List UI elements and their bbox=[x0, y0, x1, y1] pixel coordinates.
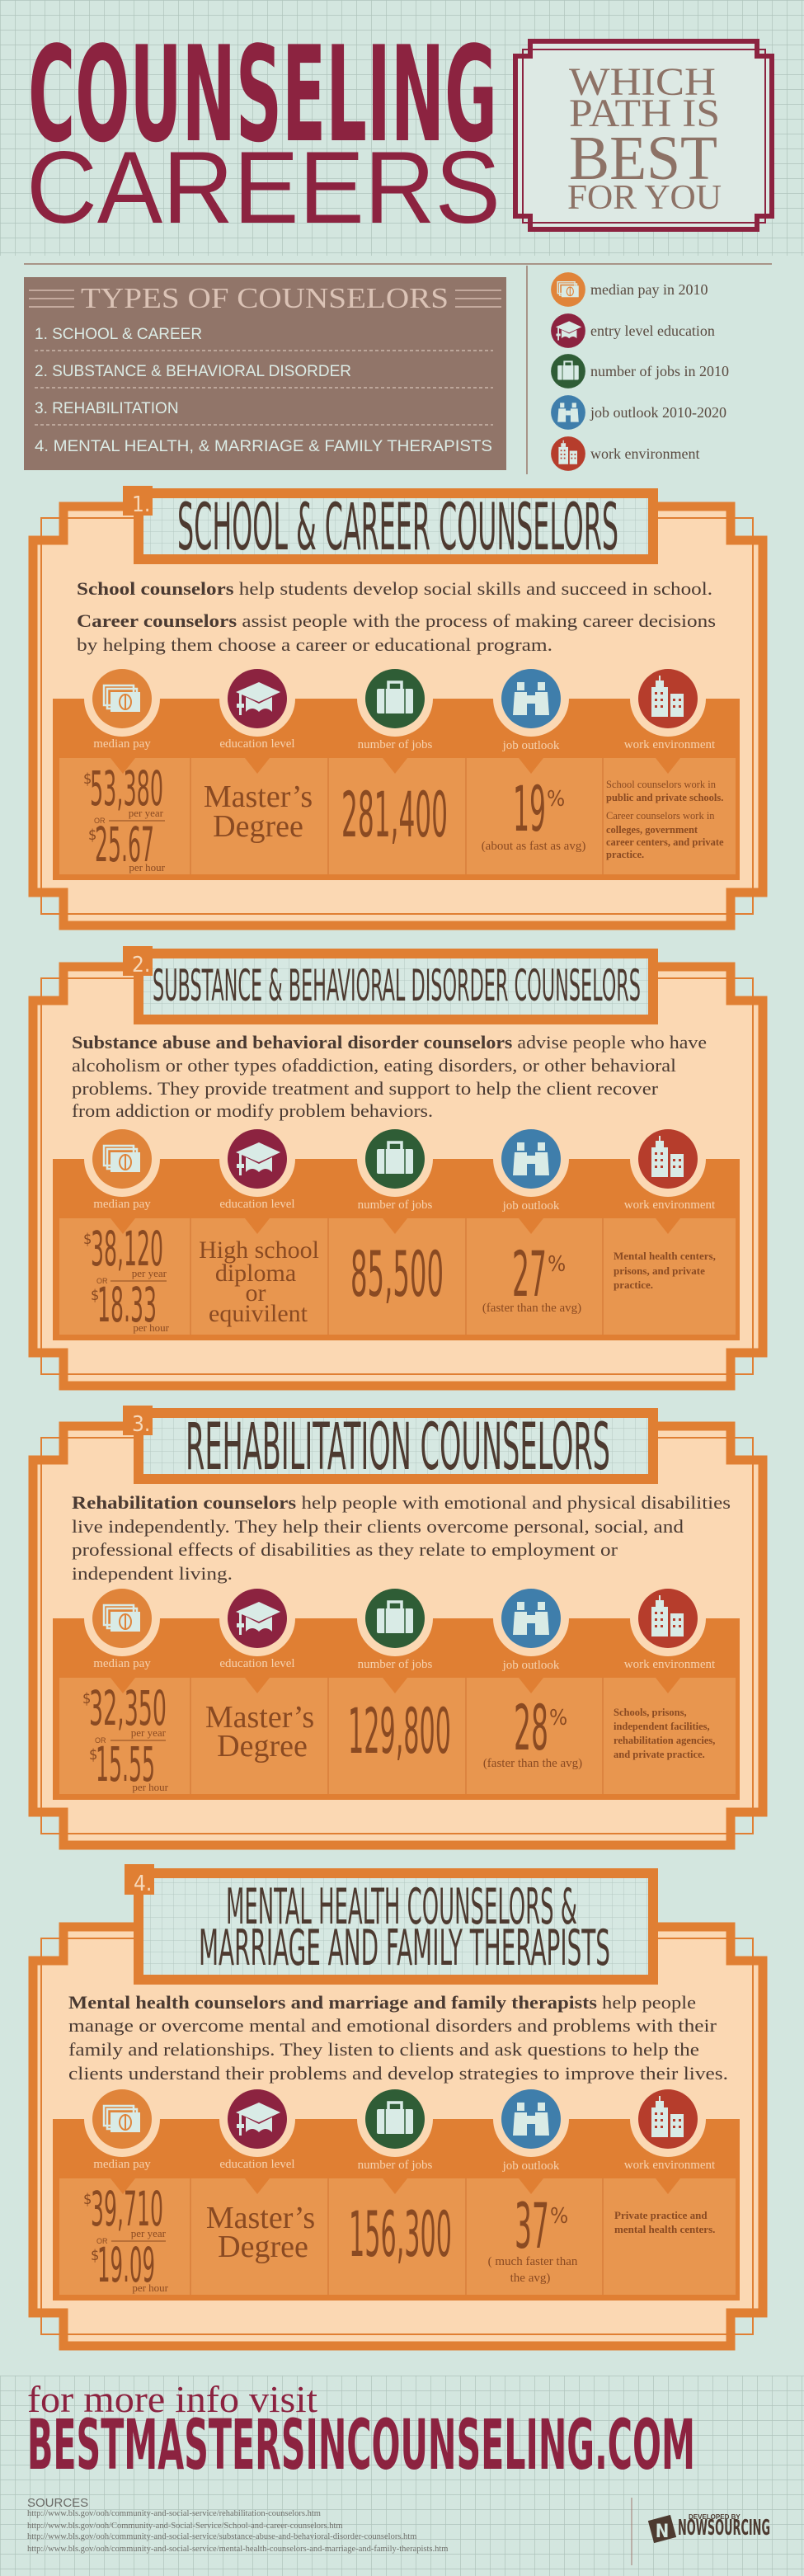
panel: section 1 school & career: job outlook bbox=[502, 739, 560, 752]
panel: section 2 substance & behavioral disorder: alcoholism or other types ofaddiction, eating disorders, or other behavioral bbox=[72, 1055, 676, 1076]
panel: section 2 substance & behavioral disorder: 85,500 bbox=[350, 1237, 444, 1311]
panel: section 2 substance & behavioral disorder: (faster than the avg) bbox=[482, 1302, 581, 1315]
panel: section 4 mental health & marriage and family therapists: job outlook bbox=[502, 2159, 560, 2173]
panel: section 1 school & career: public and private schools. bbox=[606, 792, 723, 803]
panel: section 2 substance & behavioral disorder: 27 bbox=[512, 1237, 547, 1311]
panel: section 1 school & career: colleges, government bbox=[606, 824, 698, 836]
panel: section 1 school & career: Career counselors work in bbox=[606, 810, 715, 822]
panel: section 3 rehabilitation: Schools, prisons, bbox=[614, 1707, 687, 1718]
panel: section 4 mental health & marriage and family therapists: number of jobs bbox=[358, 2159, 433, 2172]
panel: section 3 rehabilitation: 3. bbox=[132, 1412, 150, 1437]
panel: section 2 substance & behavioral disorder: Substance abuse and behavioral disorder counselors advise people who have bbox=[72, 1032, 707, 1053]
panel: section 4 mental health & marriage and family therapists: $ bbox=[91, 2247, 99, 2264]
panel: section 4 mental health & marriage and family therapists: education level bbox=[219, 2158, 295, 2171]
panel: section 3 rehabilitation: independent living. bbox=[72, 1563, 233, 1584]
panel: section 3 rehabilitation: $ bbox=[82, 1690, 91, 1707]
panel: section 1 school & career: 53,380 bbox=[90, 761, 163, 817]
panel: section 2 substance & behavioral disorder: 2. bbox=[132, 953, 150, 977]
legend: entry level education bbox=[590, 323, 715, 339]
panel: section 2 substance & behavioral disorder: education level bbox=[219, 1198, 295, 1211]
panel: section 1 school & career: Career counselors assist people with the process of making career decisions bbox=[77, 610, 716, 631]
panel: section 3 rehabilitation: (faster than the avg) bbox=[483, 1757, 582, 1770]
sources: http://www.bls.gov/ooh/community-and-social-service/mental-health-counselors-and-marriage-and-family-therapists.htm bbox=[27, 2545, 448, 2554]
panel: section 3 rehabilitation: and private practice. bbox=[614, 1749, 705, 1760]
panel: section 4 mental health & marriage and family therapists: % bbox=[550, 2204, 568, 2229]
panel: section 4 mental health & marriage and family therapists: family and relationships. They listen to clients and ask questions to help the bbox=[68, 2039, 699, 2060]
panel: section 4 mental health & marriage and family therapists: $ bbox=[83, 2191, 92, 2208]
panel: section 2 substance & behavioral disorder: number of jobs bbox=[358, 1199, 433, 1212]
panel: section 1 school & career: 25.67 bbox=[95, 817, 154, 873]
panel: types of counselors: TYPES OF COUNSELORS bbox=[81, 282, 449, 314]
panel: section 4 mental health & marriage and family therapists: per hour bbox=[132, 2282, 169, 2294]
panel: section 1 school & career: School counselors work in bbox=[606, 779, 717, 790]
panel: section 3 rehabilitation: % bbox=[549, 1706, 567, 1731]
panel: section 1 school & career: work environment bbox=[624, 738, 716, 751]
panel: section 2 substance & behavioral disorder: Mental health centers, bbox=[614, 1250, 716, 1262]
subtitle box: which path is best for you bbox=[515, 41, 772, 229]
legend: number of jobs in 2010 bbox=[590, 363, 729, 379]
panel: section 2 substance & behavioral disorder: equivilent bbox=[209, 1300, 308, 1327]
panel: section 2 substance & behavioral disorder: 38,120 bbox=[91, 1221, 163, 1277]
panel: section 3 rehabilitation: job outlook bbox=[502, 1659, 560, 1672]
panel: section 4 mental health & marriage and family therapists: mental health centers. bbox=[614, 2223, 715, 2235]
footer: call to action: for more info visit bbox=[27, 2378, 317, 2420]
panel: section 3 rehabilitation: 32,350 bbox=[89, 1680, 167, 1736]
panel: section 2 substance & behavioral disorder: High school bbox=[199, 1236, 319, 1264]
panel: section 3 rehabilitation: 15.55 bbox=[96, 1736, 155, 1792]
panel: section 2 substance & behavioral disorder: 18.33 bbox=[97, 1277, 157, 1333]
panel: types of counselors bbox=[24, 277, 506, 470]
panel: section 1 school & career: per hour bbox=[129, 861, 166, 874]
panel: section 3 rehabilitation: work environment bbox=[624, 1658, 716, 1671]
panel: section 3 rehabilitation: per hour bbox=[132, 1781, 169, 1793]
panel: section 1 school & career: by helping them choose a career or educational program. bbox=[77, 634, 552, 655]
panel: section 1 school & career bbox=[33, 486, 763, 925]
panel: section 3 rehabilitation: per year bbox=[131, 1726, 167, 1739]
panel: section 1 school & career: 1. bbox=[132, 492, 150, 517]
title: CAREERS: CAREERS bbox=[26, 131, 501, 245]
panel: section 3 rehabilitation: Degree bbox=[217, 1729, 308, 1764]
panel: section 1 school & career: Degree bbox=[213, 809, 303, 844]
panel: section 1 school & career: median pay bbox=[93, 737, 151, 751]
panel: section 3 rehabilitation: OR bbox=[95, 1736, 106, 1745]
panel: section 2 substance & behavioral disorder: prisons, and private bbox=[614, 1264, 705, 1277]
panel: section 4 mental health & marriage and family therapists: 19.09 bbox=[97, 2237, 155, 2293]
panel: section 2 substance & behavioral disorder: work environment bbox=[624, 1199, 716, 1212]
panel: section 1 school & career: 281,400 bbox=[341, 778, 448, 851]
panel: section 3 rehabilitation: education level bbox=[219, 1657, 295, 1670]
panel: section 3 rehabilitation: median pay bbox=[93, 1657, 151, 1670]
panel: section 4 mental health & marriage and family therapists: ( much faster than bbox=[488, 2255, 578, 2268]
logo: nowsourcing bbox=[648, 2513, 770, 2543]
panel: section 1 school & career: per year bbox=[129, 807, 164, 819]
legend: work environment bbox=[590, 445, 699, 462]
panel: types of counselors: 2. SUBSTANCE & BEHAVIORAL DISORDER bbox=[35, 363, 351, 380]
panel: section 4 mental health & marriage and family therapists: 4. bbox=[134, 1872, 152, 1896]
panel: section 2 substance & behavioral disorder: problems. They provide treatment and support to help the client recover bbox=[72, 1078, 659, 1099]
panel: section 1 school & career: (about as fast as avg) bbox=[482, 840, 585, 853]
panel: section 4 mental health & marriage and family therapists: 156,300 bbox=[349, 2197, 452, 2271]
footer: call to action bbox=[27, 2378, 695, 2485]
panel: types of counselors: 1. SCHOOL & CAREER bbox=[35, 326, 202, 343]
subtitle box: which path is best for you: BEST bbox=[569, 124, 717, 193]
panel: section 3 rehabilitation: Master’s bbox=[205, 1700, 314, 1735]
panel: section 1 school & career: career centers, and private bbox=[606, 836, 724, 848]
panel: section 3 rehabilitation: rehabilitation agencies, bbox=[614, 1735, 715, 1746]
panel: section 3 rehabilitation: number of jobs bbox=[358, 1658, 433, 1671]
panel: section 3 rehabilitation: live independently. They help their clients overcome personal, social, and bbox=[72, 1516, 684, 1537]
logo: nowsourcing: N bbox=[656, 2522, 669, 2542]
panel: section 4 mental health & marriage and family therapists: clients understand their problems and develop strategies to improve their lives. bbox=[68, 2063, 728, 2084]
panel: section 3 rehabilitation: $ bbox=[89, 1746, 97, 1764]
panel: section 3 rehabilitation: Rehabilitation counselors help people with emotional and physical disabilities bbox=[72, 1492, 731, 1513]
panel: section 1 school & career: % bbox=[547, 787, 565, 812]
panel: section 4 mental health & marriage and family therapists: per year bbox=[131, 2227, 167, 2239]
subtitle box: which path is best for you: PATH IS bbox=[569, 92, 720, 135]
panel: section 4 mental health & marriage and family therapists: median pay bbox=[93, 2158, 151, 2171]
panel: section 2 substance & behavioral disorder: per year bbox=[132, 1267, 167, 1279]
panel: section 4 mental health & marriage and family therapists: Degree bbox=[218, 2230, 308, 2264]
panel: section 1 school & career: $ bbox=[83, 770, 92, 788]
panel: section 1 school & career: practice. bbox=[606, 849, 644, 860]
sources bbox=[27, 2496, 632, 2565]
panel: section 2 substance & behavioral disorder bbox=[33, 946, 763, 1386]
panel: section 2 substance & behavioral disorder: per hour bbox=[133, 1321, 170, 1334]
panel: section 2 substance & behavioral disorder: diploma bbox=[215, 1260, 296, 1287]
panel: section 4 mental health & marriage and family therapists: OR bbox=[96, 2237, 108, 2245]
logo: nowsourcing: DEVELOPED BY bbox=[689, 2513, 741, 2521]
panel: section 4 mental health & marriage and family therapists: work environment bbox=[624, 2159, 716, 2172]
panel: section 4 mental health & marriage and family therapists: Master’s bbox=[206, 2201, 315, 2235]
panel: section 3 rehabilitation: professional effects of disabilities as they relate to employment or bbox=[72, 1539, 618, 1560]
panel: section 1 school & career: Master’s bbox=[204, 779, 313, 814]
panel: section 2 substance & behavioral disorder: or bbox=[246, 1279, 266, 1307]
panel: section 2 substance & behavioral disorder: $ bbox=[91, 1287, 99, 1304]
sources: http://www.bls.gov/ooh/Community-and-Social-Service/School-and-career-counselors.htm bbox=[27, 2522, 343, 2531]
panel: section 2 substance & behavioral disorder: job outlook bbox=[502, 1199, 560, 1213]
panel: section 4 mental health & marriage and family therapists: 37 bbox=[515, 2189, 549, 2263]
panel: section 4 mental health & marriage and family therapists bbox=[33, 1864, 763, 2346]
panel: types of counselors: 3. REHABILITATION bbox=[35, 400, 179, 417]
panel: section 1 school & career: $ bbox=[88, 826, 96, 844]
panel: section 4 mental health & marriage and family therapists: manage or overcome mental and emotional disorders and problems with their bbox=[68, 2015, 717, 2036]
panel: section 2 substance & behavioral disorder: from addiction or modify problem behaviors. bbox=[72, 1100, 433, 1121]
sources: http://www.bls.gov/ooh/community-and-social-service/substance-abuse-and-behavioral-disorder-counselors.htm bbox=[27, 2532, 416, 2541]
panel: section 3 rehabilitation: 28 bbox=[514, 1691, 548, 1764]
panel: section 4 mental health & marriage and family therapists: Mental health counselors and marriage and family therapists help people bbox=[68, 1992, 696, 2013]
panel: section 3 rehabilitation: 129,800 bbox=[348, 1694, 451, 1768]
sources: SOURCES bbox=[27, 2496, 88, 2510]
panel: section 1 school & career: education level bbox=[219, 737, 295, 751]
panel: section 1 school & career: number of jobs bbox=[358, 738, 433, 751]
panel: types of counselors: 4. MENTAL HEALTH, & MARRIAGE & FAMILY THERAPISTS bbox=[35, 438, 492, 455]
panel: section 4 mental health & marriage and family therapists: 39,710 bbox=[91, 2181, 163, 2237]
legend: median pay in 2010 bbox=[590, 281, 708, 298]
panel: section 2 substance & behavioral disorder: OR bbox=[96, 1277, 108, 1285]
panel: section 3 rehabilitation bbox=[33, 1406, 763, 1845]
legend bbox=[551, 272, 729, 471]
panel: section 3 rehabilitation: independent facilities, bbox=[614, 1721, 710, 1732]
subtitle box: which path is best for you: WHICH bbox=[569, 60, 716, 104]
panel: section 1 school & career: School counselors help students develop social skills and succeed in school. bbox=[77, 578, 712, 599]
legend: job outlook 2010-2020 bbox=[590, 404, 726, 421]
panel: section 2 substance & behavioral disorder: $ bbox=[83, 1231, 92, 1248]
sources: http://www.bls.gov/ooh/community-and-social-service/rehabilitation-counselors.htm bbox=[27, 2509, 321, 2518]
panel: section 1 school & career: 19 bbox=[513, 772, 546, 845]
panel: section 2 substance & behavioral disorder: practice. bbox=[614, 1279, 653, 1291]
panel: section 1 school & career: OR bbox=[94, 817, 106, 825]
panel: section 2 substance & behavioral disorder: median pay bbox=[93, 1198, 151, 1211]
panel: section 4 mental health & marriage and family therapists: the avg) bbox=[510, 2272, 550, 2285]
panel: section 2 substance & behavioral disorder: % bbox=[548, 1252, 566, 1277]
panel: section 4 mental health & marriage and family therapists: Private practice and bbox=[614, 2209, 708, 2221]
subtitle box: which path is best for you: FOR YOU bbox=[567, 179, 722, 217]
